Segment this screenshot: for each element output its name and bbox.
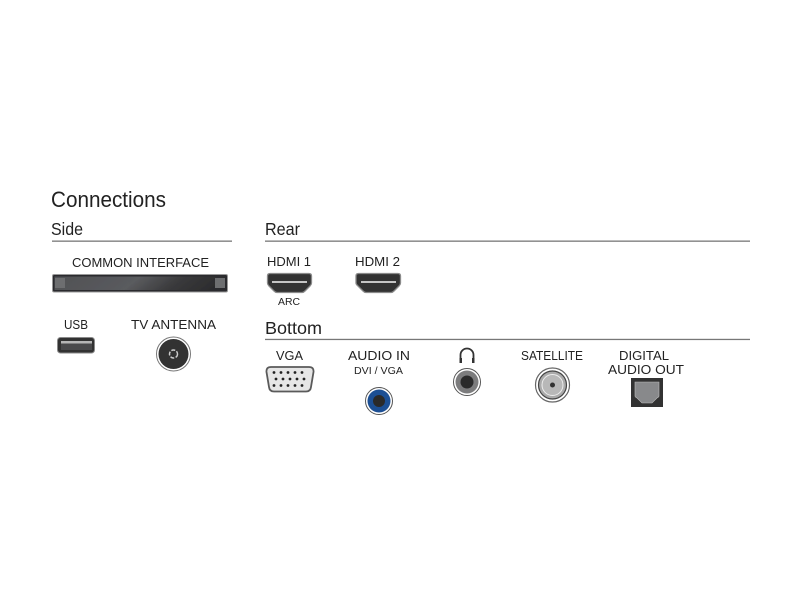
heading: rear: Rear (265, 219, 300, 239)
digital audio out: DIGITAL (619, 348, 669, 363)
hdmi 1: HDMI 1 (267, 254, 311, 269)
tv antenna (131, 317, 216, 371)
heading: bottom: Bottom (265, 318, 322, 338)
audio in: AUDIO IN (348, 348, 410, 363)
vga (266, 348, 314, 392)
satellite (521, 348, 583, 402)
audio in (348, 348, 410, 414)
common interface (52, 255, 228, 292)
hdmi 1 (267, 254, 312, 308)
common interface: COMMON INTERFACE (72, 255, 209, 270)
title: Connections (51, 187, 166, 212)
heading: side: Side (51, 219, 83, 239)
digital audio out: AUDIO OUT (608, 362, 684, 377)
headphone jack (454, 368, 480, 396)
audio in: DVI / VGA (354, 365, 403, 377)
tv antenna: TV ANTENNA (131, 317, 216, 332)
hdmi 2: HDMI 2 (355, 254, 400, 269)
vga: VGA (276, 348, 303, 363)
usb: USB (64, 317, 88, 332)
satellite: SATELLITE (521, 348, 583, 363)
icon: headphones (460, 348, 474, 363)
usb (58, 317, 94, 353)
hdmi 1: ARC (278, 296, 300, 308)
digital audio out (608, 348, 684, 407)
hdmi 2 (355, 254, 400, 292)
